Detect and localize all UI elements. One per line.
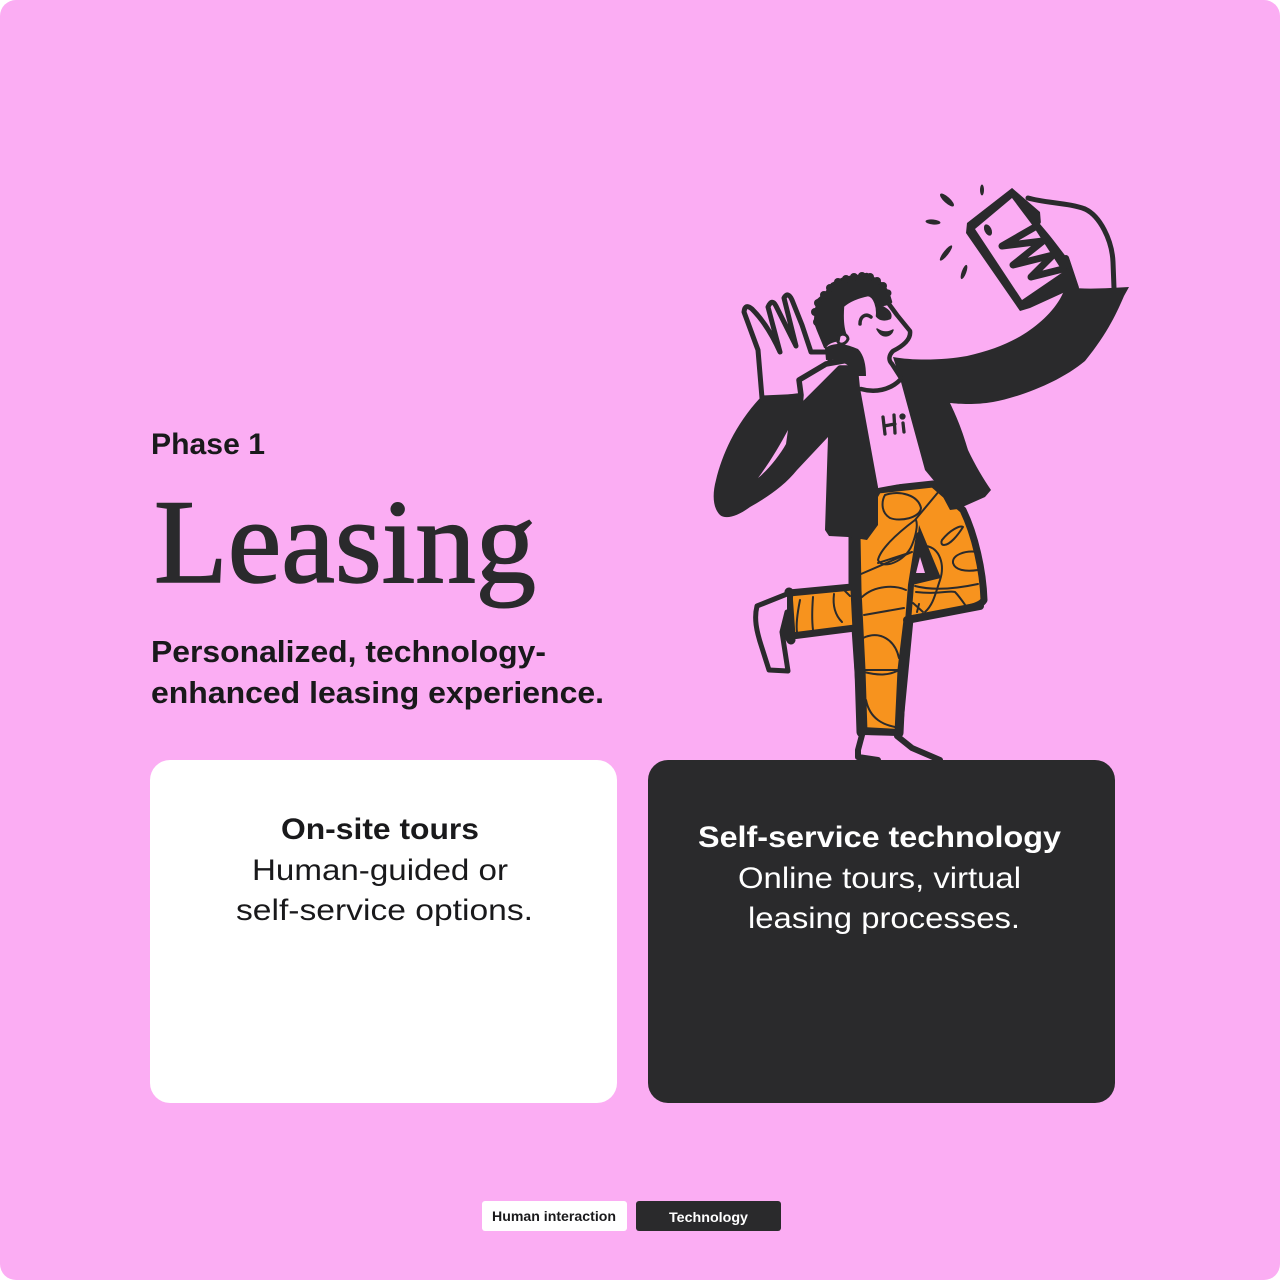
legend: human interaction: Human interaction <box>492 1208 616 1224</box>
hand: waving <box>744 295 830 398</box>
neck and face <box>843 292 910 390</box>
pants scribble lines <box>797 490 978 727</box>
left jacket panel and sleeve <box>714 368 878 540</box>
pants <box>785 484 984 733</box>
text: on-site tours description <box>236 854 533 927</box>
text: subtitle: enhanced leasing experience. <box>151 675 604 710</box>
head <box>811 272 910 391</box>
face details <box>860 315 871 324</box>
panel: self-service technology <box>648 760 1115 1103</box>
ear <box>838 334 848 344</box>
legend: technology: Technology <box>669 1209 748 1225</box>
text: subtitle <box>151 634 604 710</box>
pants crotch gap <box>912 525 941 585</box>
collar flap <box>799 358 864 408</box>
legend: human interaction <box>482 1201 627 1231</box>
t-shirt torso <box>860 378 932 488</box>
illustration: person taking a selfie <box>714 184 1129 760</box>
icon: phone with fingers <box>966 188 1076 311</box>
chin shadow <box>825 344 866 376</box>
icon: jacket and arms <box>714 287 1129 540</box>
front leg inner edges <box>855 535 862 732</box>
shoe: raised foot <box>756 594 788 671</box>
hair <box>811 272 892 347</box>
legend: technology <box>636 1201 781 1231</box>
forearm outline behind phone <box>1028 198 1114 288</box>
shirt text <box>883 415 904 434</box>
text: subtitle: Personalized, technology- <box>151 634 546 669</box>
text: self-service description <box>738 862 1021 935</box>
title: Leasing <box>154 475 536 608</box>
heading: on-site tours: On-site tours <box>281 813 479 846</box>
raised phone arm and right jacket panel <box>893 287 1129 510</box>
text: self-service description: Online tours, virtual <box>738 862 1021 895</box>
panel: on-site tours <box>150 760 617 1103</box>
text: on-site tours description: self-service options. <box>236 894 533 927</box>
shirt collar <box>861 380 900 391</box>
jacket sleeve highlight <box>758 430 788 478</box>
foot on the platform <box>858 735 940 760</box>
back-leg cuff <box>785 592 791 640</box>
text: phase label: Phase 1 <box>151 428 265 461</box>
heading: self-service technology: Self-service technology <box>698 821 1061 854</box>
text: on-site tours description: Human-guided or <box>252 854 508 887</box>
text: self-service description: leasing processes. <box>748 902 1020 935</box>
icon: camera flash marks <box>925 184 984 280</box>
